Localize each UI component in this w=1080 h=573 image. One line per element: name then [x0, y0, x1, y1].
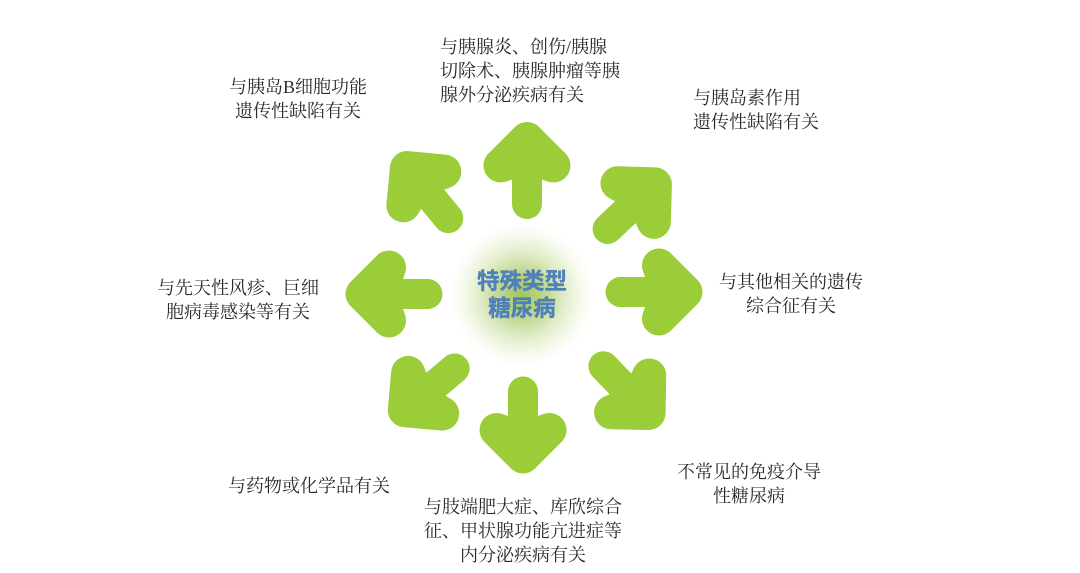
text: lower left: 与药物或化学品有关 [228, 476, 390, 496]
text: bottom [424, 497, 622, 565]
text: top: 切除术、胰腺肿瘤等胰 [440, 61, 620, 81]
text: bottom: 征、甲状腺功能亢进症等 [424, 521, 622, 541]
arrow: up [500, 139, 554, 204]
text: lower right: 不常见的免疫介导 [677, 462, 821, 482]
text: bottom: 内分泌疾病有关 [460, 545, 586, 565]
central glow [450, 223, 594, 367]
text: upper right [693, 88, 819, 132]
arrow: upper right [589, 165, 673, 248]
text: right [719, 272, 863, 316]
arrow: down [496, 392, 550, 456]
arrow: left [362, 268, 428, 320]
text: upper right: 遗传性缺陷有关 [693, 112, 819, 132]
text: left [157, 278, 319, 322]
text: upper left: 遗传性缺陷有关 [235, 101, 361, 121]
text: upper left: 与胰岛B细胞功能 [229, 77, 367, 97]
text: upper left [229, 77, 367, 121]
text: lower right [677, 462, 821, 506]
arrow: right [620, 266, 686, 318]
text: left: 胞病毒感染等有关 [166, 302, 310, 322]
central title: 糖尿病 [488, 296, 556, 321]
central title [477, 269, 567, 321]
text: left: 与先天性风疹、巨细 [157, 278, 319, 298]
arrow: lower right [584, 348, 668, 431]
text: right: 与其他相关的遗传 [719, 272, 863, 292]
text: upper right: 与胰岛素作用 [693, 88, 801, 108]
arrow: lower left [388, 348, 472, 431]
text: right: 综合征有关 [746, 296, 836, 316]
text: top [440, 37, 620, 105]
text: lower right: 性糖尿病 [713, 486, 785, 506]
text: bottom: 与肢端肥大症、库欣综合 [424, 497, 622, 517]
text: top: 与胰腺炎、创伤/胰腺 [440, 37, 607, 57]
arrow: upper left [387, 151, 469, 235]
central title: 特殊类型 [477, 269, 567, 294]
text: top: 腺外分泌疾病有关 [440, 85, 584, 105]
